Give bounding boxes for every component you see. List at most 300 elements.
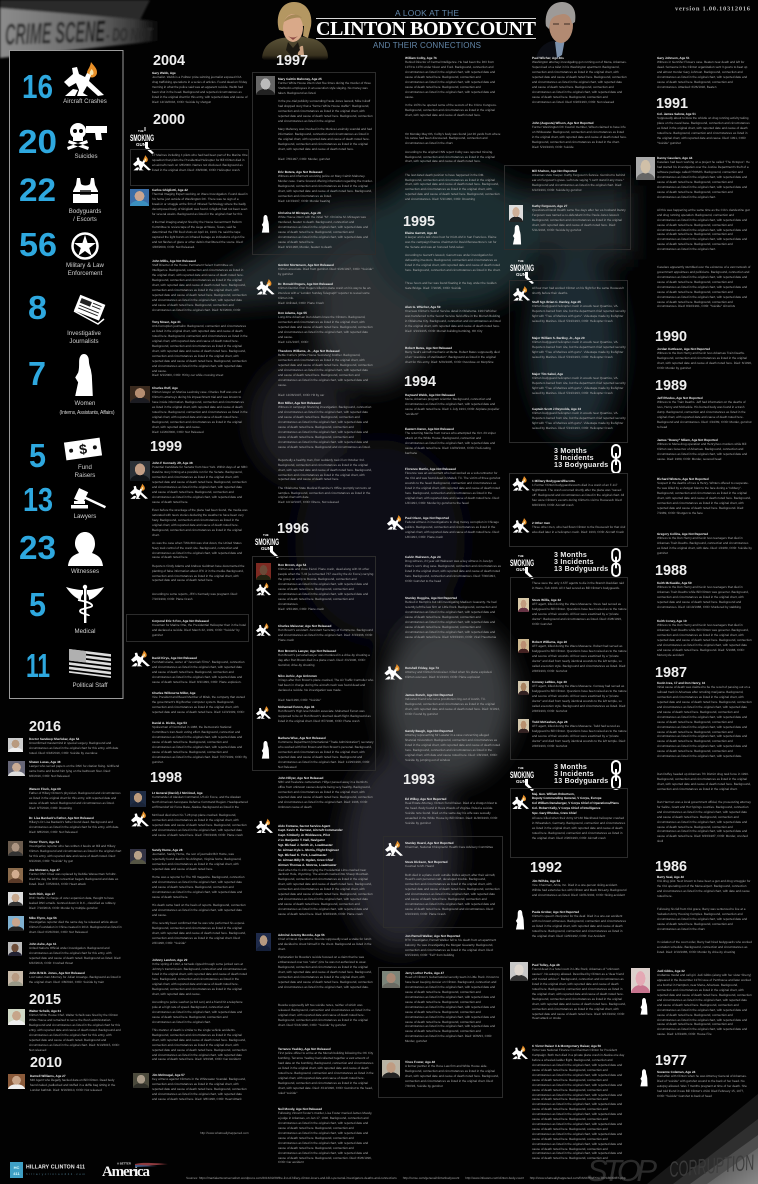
heading: 1996: 1996 — [277, 521, 309, 537]
entry: Elaine Barrett: A lawyer and a talk show host for KGO-AM in San Francisco. Elaine was the campaign finance chairman for David Bonaventure's run for the Senate and was an honored fund-raiser. — [405, 235, 497, 249]
entry: Richard Winters: Richard Winters, Age Not Reported — [657, 476, 709, 480]
women — [28, 354, 115, 416]
icon: plane crash — [131, 650, 150, 666]
photo: Danny Casolaro — [636, 157, 655, 180]
women: Women — [75, 400, 95, 407]
entry: Hershell Friday: Hershell Friday, Age 73 — [405, 666, 439, 670]
entry: Keith Coney: Witness to the Don Henry and Kevin Ives teenagers that died in Arkansas Train Deaths while Bill Clinton was governor. Background, connection and circumstances as listed in the original chart, with reported date and cause of death noted here. Background, connection and circumstances as listed in the original chart, with reported date and cause of death noted here. Background. Died: 5/1988, COD: Motorcycle accident — [657, 623, 752, 657]
entry: V Corps officers: Deputy Commanding General, V Corps, Europe — [532, 796, 601, 800]
entry: Robert Bates: Robert Bates, Age Not Released — [405, 346, 452, 350]
photo: Carlos Ghigliotti — [130, 189, 149, 206]
entry: Christine M Mirzayan: White House intern with the initial "M". Christine M. Mirzayan was murdered, beaten to death. Background, connection and circumstances as listed in the original chart, with reported date and cause of death noted here. Background, connection and circumstances as listed in the original chart, with reported date and cause of death noted here. — [278, 215, 368, 244]
box: bodyguards group — [509, 473, 628, 547]
entry: Darrell Williams: MI6 Agent who illegally hacked data on Bill Clinton. Dead body found naked, padlocked and stuffed in a duffle bag sitting in the London bathtub. Died: 8/16/2010, COD: Not released — [30, 1078, 115, 1092]
entry: Johnny Lawhon: Johnny Lawhon, Age 29 — [152, 958, 187, 962]
icon: plane crash — [256, 279, 275, 295]
entry: Danny Casolaro: All this was happening at the same time as the CIA's clandestine gun and drug running operation. Background, connection and circumstances as listed in the original chart, with reported date and cause of death noted here. Background, connection and circumstances as listed in the original chart, with reported date and cause of death noted here. Background, connection and circumstances as listed in the original chart, with reported date and cause of death noted here. Background, connection and circumstances as listed in the original chart. — [657, 208, 750, 251]
entry: Sandy Hume: Hume was a reporter for The Hill magazine. Background, connection and circumstances as listed in the original chart, with reported date and cause of death noted here. Background, connection and circumstances as listed in the original chart, with reported date and cause of death noted here. — [152, 875, 244, 899]
crime scene tape — [0, 0, 158, 60]
photo: Kathy Ferguson — [509, 205, 523, 222]
entry: Joe Montano: Joe Montano, Age 47 — [29, 868, 60, 872]
entry: Air Force C-130 crew: Sgt. Michael K. York, Loadmaster — [278, 853, 327, 857]
box: Corporal Eric S Fox — [126, 614, 249, 642]
entry: V Corps officers: Col William Densberger, V Corps Chief of Operations/Plans — [532, 801, 619, 805]
entry: Air Force C-130 crew: Capt. Kevin H. Earnest, Aircraft Commander — [278, 828, 343, 832]
entry: Alan G Whicher: Oversaw Clinton's Secret Service detail in Oklahoma. 1994 Whicher was transferred to the Secret Service field office in the Murrah Building in Oklahoma City. Background, connection and circumstances as listed in the original chart, with reported date and cause of death noted here. Died: 4/19/1995, COD: Murrah building bombing, OK City — [405, 309, 501, 333]
political staff: 11 — [26, 647, 50, 684]
entry: Steve Willis: ATF agent, killed during the Waco Massacre. Steve had served as bodyguard to Bill Clinton. Questions have been raised as to the nature and source of their wounds. All four were examined by a "private doctor". Background and circumstances as listed. Died: 2/28/1993, COD: Gunshot — [532, 602, 627, 626]
box: 1997 group — [252, 72, 376, 255]
entry: Mohamed Fenon — [278, 704, 374, 729]
entry: Ron Brown: Clinton aide and close friend. Plane crash, dead along with 34 other people when the T-43 (a converted 737 used by the Air Force) carrying the group on a trip to Bosnia. Background, connection and circumstances as listed in the original chart, with reported date and cause of death noted here. Background, connection and circumstances as listed in the original chart, with reported date and cause of death noted here. Background, connection and circumstances. — [278, 567, 373, 606]
box: helicopter pilot — [130, 149, 249, 186]
icon: smoking gun logo — [510, 764, 536, 791]
entry: Robert Bates — [405, 346, 501, 370]
box: 1996 Ron Brown group — [252, 556, 376, 771]
entry: Ron Miller: Died: 10/12/1997, COD: Illness, Not released — [278, 500, 339, 504]
entry: Kevin Ives and Don Henry: Dan Harmon was a local government official, the prosecuting attorney for Saline, Grant and Hot Springs counties. Background, connection and circumstances as listed in the original chart, with reported date and cause of death noted here. Background, connection and circumstances as listed in the original chart, with reported date and cause of death noted here. Background, connection and circumstances as listed in the original chart, with reported date and cause of death noted here. Died: 8/23/1987, COD: Murder, crushed skull — [657, 800, 751, 843]
entry: Dr Ronald Rogers — [278, 282, 374, 306]
entry: Jordan Kettleson — [657, 346, 752, 376]
women: (Interns, Assistants, Affairs) — [60, 410, 115, 416]
entry: Robert Williams: ATF agent, killed during the Waco Massacre. Robert had served as bodyguard to Bill Clinton. Questions have been raised as to the nature and source of their wounds. All four were examined by a "private doctor" and died from nearly identical wounds to the left temple, so called execution style. Background and circumstances as listed. Died: 2/28/1993, COD: Gunshot — [532, 644, 627, 673]
entry: William Colby: William Colby, Age 76 — [405, 56, 437, 60]
entry: Elaine Barrett: Three hours and her was found floating in the bay under the Golden Gate Bridge. Died: 7/16/95, COD: Suicide — [405, 281, 496, 290]
logo: Hillary Clinton 411: 411 — [13, 1171, 21, 1176]
entry: Ron Brown's Lawyer — [278, 648, 374, 668]
entry: Charles Meissner — [278, 624, 374, 643]
entry: John F Kennedy Jr — [152, 460, 248, 601]
entry: Ron Miller: Reportedly a healthy man, Ron suddenly took ill on October 3rd. Background, connection and circumstances as listed in the original chart, with reported date and cause of death noted here. Background, connection and circumstances as listed in the original chart, with reported date and cause of death noted here. — [278, 458, 372, 481]
lawyers: 13 — [23, 481, 53, 518]
entry: Mohamed Fenon: Mohamed Fenon, Age 36 — [278, 704, 314, 708]
logo: Hillary Clinton 411: hillaryclinton411.com — [26, 1172, 85, 1176]
investigative journalists: Journalists — [69, 338, 99, 345]
entry: William S Barkley: Major William S. Barkley, Jr., Age 29 — [532, 336, 585, 340]
bodyguards and escorts: / Escorts — [73, 216, 97, 223]
entry: Todd McKeehan: ATF agent, killed during the Waco Massacre. Todd had served as bodyguard to Bill Clinton. Questions have been raised as to the nature and source of their wounds. All four were examined by a "private doctor" and died from nearly identical wounds to the left temple. Died: 2/28/1993, COD: Gunshot — [532, 724, 627, 748]
entry: John August Wilson: John (Augusta) Wilson, Age Not Reported — [532, 120, 594, 124]
entry: V Corps officers — [532, 792, 627, 850]
entry: Barry Seal: In violation of the court order, Barry had hired bodyguards who worked a rotation schedule. Background, connection and circumstances as listed. Died: 2/19/1986, COD: Murder by drive-by shooting — [657, 940, 752, 954]
callout: 3 months 3 incidents 13 bodyguards: 3 Months — [554, 447, 587, 455]
entry: Victor Thorn: Victor Thorn, Age 54 — [29, 840, 59, 844]
entry: 1 Military Bodyguards — [532, 478, 627, 513]
suicides: 20 — [18, 123, 57, 160]
photo: Jim McDougal — [133, 1073, 149, 1088]
icon: plane crash — [130, 484, 148, 499]
entry: Kevin Ives and Don Henry: Dan Duffey headed up Arkansas 7th District drug task force in 1990. Background, connection and circumstances as listed in the original chart, with reported date and cause of death noted here. Background, connection and circumstances as listed in the original chart. — [657, 772, 751, 791]
witnesses: 23 — [19, 529, 56, 566]
entry: Tim Sabel — [532, 372, 627, 401]
entry: Dr Ronald Rogers: Died: Unlisted, COD: Plane Crash — [278, 301, 324, 305]
photo: Mike Flynn — [8, 916, 24, 931]
photo: Judi Gibbs — [631, 968, 650, 993]
icon: plane crash — [384, 664, 403, 680]
entry: Jerry Luther Parks: Head of Clinton's Gubernatorial security team in Little Rock. Known to have been keeping dossier on Clinton. Background, connection and circumstances as listed in the original chart, with reported date and cause of death noted here. Background, connection and circumstances as listed in the original chart, with reported date and cause of death noted here. Background, connection and circumstances as listed in the original chart, with reported date and cause of death noted here. Background, connection and circumstances as listed in the original chart, with reported date and cause of death noted here. Background, connection and circumstances as listed in the original chart, with reported date and cause of death noted here. Background, connection and circumstances as listed in the original chart. Died: 9/26/93, COD: Murder, gunshot — [405, 975, 499, 1043]
entry: Charles Ruff: Died: 11/20/2000, COD: Not Released — [152, 430, 204, 434]
entry: Hershell Friday — [405, 666, 501, 685]
photo: Victor Thorn — [8, 841, 23, 856]
entry: Jon Parnell Walker: RTC Investigator, Parnell Walker fell to his death from an apartment balcony. He was investigating the Morgan Guaranty. Background, connection and circumstances as listed in the original chart. Died: 8/15/1993, COD: "Fell" from building — [405, 938, 496, 957]
entry: Daniel A Dickie: Daniel A. Dickie, Age 53 — [152, 720, 187, 724]
heading: 1992: 1992 — [530, 860, 562, 876]
entry: Theodore Williams Jr: Theodore Williams, Jr. , Age Not Released — [278, 348, 340, 352]
entry: Niko Jurisic — [278, 674, 374, 703]
heading: 1990: 1990 — [655, 329, 687, 345]
entry: Alan G Whicher: Alan G. Whicher, Age 59 — [405, 304, 440, 308]
icon: plane crash — [512, 793, 529, 811]
icon: smoking gun logo: GUN — [261, 546, 271, 551]
entry: Ron Brown's Lawyer: Ron Brown's Lawyer, Age Not Released — [278, 648, 336, 652]
entry: 2 Other men: 2 Other men — [532, 520, 550, 524]
icon: smoking gun logo: SMOKING — [510, 558, 534, 569]
entry: Charles Ruff: Clinton lawyer on Monica Lewinsky case. Charles Ruff was one of Clinton's attorneys during his impeachment trial and was known to have inside information. Background, connection and circumstances as listed in the original chart, with reported date and cause of death noted here. Background, connection and circumstances as listed in the original chart, with reported date and cause of death noted here. Background, connection and circumstances as listed in the original chart, with reported date and cause. — [152, 390, 248, 429]
photo: Mary Caitrin Mahoney — [256, 76, 275, 95]
icon: woman — [515, 910, 525, 930]
entry: Calvin Walraven: Calvin Walraven, Age 24 — [405, 554, 441, 558]
aircraft crashes: 16 — [22, 68, 53, 105]
entry: Walter Scheib: Walter Scheib, Age 61 — [29, 1008, 61, 1012]
entry: V Corps officers: All were killed when their Army UH-60 Blackhawk helicopter crashed in Wheatsden, Germany. Background, connection and circumstances as listed in the original chart, with reported date and cause of death noted here. Background, connection and circumstances as listed in the original chart. Died: 2/20/1993, COD: Aircraft crash — [532, 816, 625, 840]
entry: James Dewey Milam: Witness to Mena drug operation and Henry/Ives murders while Bill Clinton was Governor of Arkansas. Background, connection and circumstances as listed in the original chart, with reported date and cause. Died: 1989, COD: Murder, severed head — [657, 442, 747, 461]
entry: Sandy Hume: Sandy Hume, Age 28 — [152, 848, 182, 852]
icon: smoking gun logo: GUN — [516, 567, 526, 572]
entry: Johnny Lawhon — [152, 958, 247, 1061]
entry: Kathy Ferguson: Questioned David Dealth same five days after her ex-husband Danny Ferguson was named a co-defendant in the Paula Jones lawsuit. Background, connection and circumstances as listed in the original chart, with reported date and cause of death noted here. Died: 5/11/1994, COD: Suicide by gunshot — [532, 208, 626, 232]
entry: Christine M Mirzayan: Christine M Mirzayan, Age 28 — [278, 210, 321, 214]
bodyguards and escorts: Bodyguards — [69, 208, 101, 215]
entry: Shawn Lucas: Shawn Lucas, Age 38 — [29, 760, 61, 764]
entry: James Dewey Milam — [657, 438, 752, 472]
heading: 1987: 1987 — [655, 665, 687, 681]
suicides: Suicides — [74, 153, 98, 160]
entry: William Colby: On Monday May 6th, Colby's body was found just 20 yards from where his canoe had been discovered. Background, connection and circumstances as listed in the chart. — [405, 132, 500, 145]
entry: Steve Willis — [532, 598, 627, 632]
entry: Mike Flynn: Mike Flynn, Age 56 — [29, 916, 57, 920]
entry: Mohamed Fenon: Ron Brown's High level Muslim associate. Mohamed Fenon was supposed to be on Ron Brown's doomed death flight. Background as listed in the original chart. Died: 8/7/1996, COD: Plane crash — [278, 709, 371, 723]
entry: Gary Johnson: Gary Johnson, Age 51 — [657, 56, 690, 60]
entry: Lt General McCloud — [152, 790, 248, 837]
entry: Charles Meissner: Charles Meissner, Age Not Released — [278, 624, 331, 628]
entry: Robert Williams: Robert Williams, Age 26 — [532, 640, 567, 644]
political staff — [26, 647, 111, 689]
logo: Hillary Clinton 411 — [8, 1158, 88, 1182]
military and law enforcement: Enforcement — [68, 270, 103, 277]
entry: Ron Brown's Lawyer: Ron Brown's personal lawyer was murdered in a drive-by shooting a day after Ron Brown died in a plane crash. Died: 4/4/1996, COD: Gunshot, drive-by shooting — [278, 653, 370, 667]
callout: 3 months 3 incidents 13 bodyguards: 3 Incidents — [554, 454, 594, 462]
icon: smoking gun logo: SMOKING — [130, 133, 154, 144]
entry: Sandy Hume: His death came hard on the heels of reports. Background, connection and circumstances as listed in the original chart, with reported date and cause. — [152, 903, 246, 917]
icon: plane crash — [133, 155, 151, 170]
callout: 3 months 3 incidents 13 bodyguards: 13 Bodyguards — [554, 565, 608, 573]
entry: Johnny Lawhon: This manner of death is similar to the single vehicle accidents. Background, connection and circumstances as listed in the original chart, with reported date and cause of death noted here. Background, connection and circumstances as listed in the original chart, with reported date and cause of death noted here. Background, connection and circumstances as listed in the original chart, with reported date and cause of death noted here. Died: 3/29/98, COD: Car Accident — [152, 1028, 247, 1061]
entry: Brian C Hanley: Staff Sgt. Brian C. Hanley, Age 25 — [532, 300, 581, 304]
icon: smoking gun logo: GUN — [136, 142, 146, 147]
entry: Christine M Mirzayan — [278, 210, 374, 250]
entry: Theodore Williams Jr: Bettie Currie's (White House Secretary) brother. Background, connection and circumstances as listed in the original chart, with reported date and cause of death noted here. Background, connection and circumstances as listed in the original chart, with reported date and cause of death noted here. Background, connection and circumstances as listed in the original chart, with reported date and cause. — [278, 353, 373, 387]
icon: smoking gun logo: SMOKING — [255, 537, 279, 548]
entry: Elaine Barrett: Elaine Garrett, Age 46 — [405, 230, 437, 234]
text: ATF agents intro: These were the only 4 ATF agents to die in the Branch Davidian raid in Waco, Feb 1993. All 4 had served as Bill Clinton's bodyguards. — [532, 581, 624, 590]
box: 1993 helicopter group — [509, 280, 628, 443]
photo: Sherlekar — [8, 738, 23, 752]
photo: McCloud — [130, 791, 146, 807]
entry: Gary Johnson — [657, 56, 752, 95]
entry: Admiral Jeremy Boorda: Boorda supposedly left two suicide notes, neither of which was released. Background, connection and circumstances as listed in the original chart, with reported date and cause of death noted here. Background, connection and circumstances as listed in the original chart. Died: 5/16/1996, COD: "Suicide" by gunshot — [278, 1003, 371, 1027]
entry: James Dewey Milam: James "Dewey" Milam, Age Not Reported — [657, 438, 718, 442]
entry: Mike Flynn: Investigative reporter died the same day he released article about Clinton Foundation in China created in 2014. Background as listed in chart. Died: 6/23/2016, COD: Not Released — [29, 920, 122, 934]
photo: Charles Ruff — [130, 386, 150, 403]
icon: chain — [611, 548, 621, 577]
entry: Danny Casolaro — [657, 156, 752, 324]
entry: David Kirys: David Kirys, Age Not Released — [152, 656, 197, 660]
investigative journalists: 8 — [28, 289, 47, 326]
entry: Scott J Reynolds: Clinton bodyguard helicopter crash in woods near Quantico, VA. Reporters barred from site, but the department chief reported security fight with "Tree of Marines with guns". Videotape made by firefighter seized by Marines. Died: 5/19/1993, COD: Helicopter Crash — [532, 411, 626, 430]
icon: smoking gun logo — [510, 552, 536, 579]
entry: Eleanor Darwin: Eastern Daren, Age Not Released — [405, 426, 454, 430]
entry: Corporal Eric S Fox: Corporal Eric S Fox, Age Not Released — [152, 618, 209, 622]
box: ATF agents group — [510, 577, 628, 760]
medical — [29, 585, 104, 635]
photo: Walter Scheib — [8, 1009, 25, 1025]
entry: Neil Moody: Neil Moody, Age Not Released — [278, 1106, 322, 1110]
fund raisers: Raisers — [75, 472, 95, 479]
photo: Sandy Hume — [130, 849, 146, 864]
lawyers — [23, 481, 108, 520]
entry: Danny Casolaro: Casolaro had been working on a project he called "The Octopus". He had started his investigation over the Justice Department's theft of a software package called PROMIS. Background, connection and circumstances as listed in the original chart, with reported date and cause of death noted here. Background, connection and circumstances as listed in the original chart, with reported date and cause of death noted here. Background, connection and circumstances as listed in the original chart. — [657, 160, 750, 199]
military and law enforcement: Military & Law — [66, 262, 105, 269]
entry: John F Kennedy Jr: Even before the wreckage of the plane had been found, the media was saturated with news stories declaring the weather to have been very hazy. Background, connection and circumstances as listed in the original chart, with reported date and cause of death noted here. Background, connection and circumstances as listed in the original chart. — [152, 508, 248, 536]
entry: Sandy Hume: If he recently been confirmed that he was who performed his exposé. Background, connection and circumstances as listed in the original chart, with reported date and cause of death noted here. Background, connection and circumstances as listed in the original chart. Died: 2/2/1998, COD: "Suicide" — [152, 921, 246, 945]
entry: Paul Wilcher: Washington attorney investigating gun running out of Mena, Arkansas. Supervised on a toilet in his Washington apartment. Background, connection and circumstances as listed in the original chart, with reported date and cause of death noted here. Background, connection and circumstances as listed in the original chart, with reported date and cause of death noted here. Background, connection and circumstances as listed in the original chart, with reported date and cause of death noted here. Background, connection and circumstances as listed. Died: 6/22/1993, COD: Not released — [532, 60, 627, 104]
entry: Judi Gibbs: Arubance model and call girl. Judi Gibbs (along with her sister Sherry) appeared in the December 1979 issue of Penthouse and later worked at a brothel in Hampton, near Mena, Arkansas. Background, connection and circumstances as listed in the original chart, with reported date and cause of death noted here. Background, connection and circumstances as listed in the original chart, with reported date and cause of death noted here. Background, connection and circumstances as listed in the original chart, with reported date and cause of death noted here. Background, connection and circumstances as listed in the original chart, with reported date and cause of death noted here. Background, connection and circumstances as listed in the original chart, with reported date and cause. Died: 1/2/1986, COD: House Fire — [657, 973, 752, 1036]
entry: Eric Butera: Witness and informant assisting police on Mary Caitrin Mahoney. Murder case. Came forward offering information regarding the murder. Background, connection and circumstances as listed in the original chart, with reported date and cause of death noted here. Background, connection and circumstances as listed. — [278, 174, 373, 198]
heading: 1995: 1995 — [403, 214, 435, 230]
photo: Ron Brown — [256, 563, 271, 580]
icon: smoking gun logo — [510, 257, 536, 284]
entry: Niko Jurisic: Died: Mar/1996, COD: "Suicide" — [278, 698, 321, 702]
photo: Robert Williams — [518, 639, 529, 653]
callout: 3 months 3 incidents 13 bodyguards — [554, 448, 610, 470]
entry: Tony Moser: Anti-Corruption journalist. Background, connection and circumstances as listed in the original chart, with reported date and cause of death noted here. Background, connection and circumstances as listed in the original chart, with reported date and cause of death noted here. Background, connection and circumstances as listed in the original chart, with reported date and cause of death noted here. Background, connection and circumstances as listed in the original chart, with reported date and cause of death noted here. Background, connection and circumstances as listed in the original chart, with reported date and cause. — [152, 324, 248, 373]
entry: Stanley Heard: Stanley Heard, Age Not Reported — [405, 840, 454, 844]
entry: Keith McKaskle: Keith McKaskle, Age 59 — [657, 580, 692, 584]
photo: Bill Clinton — [536, 2, 576, 58]
version label: version 1.00.10312016 — [675, 6, 751, 12]
heading: 1989: 1989 — [655, 378, 687, 394]
entry: John Jones — [29, 970, 121, 984]
entry: Christine M Mirzayan: Died: 8/1/1998, Murder, beaten to death — [278, 245, 332, 249]
fund raisers: $ — [78, 441, 88, 457]
entry: Bill Shelton — [532, 168, 627, 198]
entry: Kevin Ives and Don Henry: Kevin Ives, 17 and Don Henry, 16 — [657, 680, 705, 684]
fund raisers: Fund — [78, 464, 92, 471]
entry: Air Force C-130 crew: Sr. Airman Billy R. Ogden, Crew Chief — [278, 858, 333, 862]
witnesses — [19, 529, 103, 575]
entry: Richard Winters: Suspect in the deaths of Ives & Henry. Winters offered to cooperate. He was killed by a shotgun blast to the face during a "robbery". Background, connection and circumstances as listed in the original chart, with reported date and cause of death noted here. Background, connection and circumstances as listed in the original chart, with reported date and cause of death noted here. Background. Died: 7/1989, COD: Shotgun to the face — [657, 481, 751, 515]
entry: Brian C Hanley — [532, 300, 627, 329]
icon: plane crash — [256, 582, 271, 596]
icon: plane crash — [256, 622, 271, 637]
entry: John F Kennedy Jr: According to some reports, JFK's Kennedy was pregnant. Died: 7/16/1999, COD: Plane Crash — [152, 592, 238, 601]
entry: Barry Seal — [657, 874, 752, 960]
entry: Theodore Williams Jr — [278, 348, 374, 397]
entry: William Colby: The last dated death position to have happened in the DM. Background, connection and circumstances as listed in the original chart, with reported date and cause of death noted here. Background, connection and circumstances as listed in the original chart, with reported date and cause of death noted here. Background, connection and circumstances. Died: 5/1/1996, COD: Drowning — [405, 173, 500, 201]
icon: woman — [261, 741, 270, 759]
entry: Sandy Hume — [152, 848, 246, 945]
entry: Jeff Rhodes: Jeff Rhodes, Age Not Reported — [657, 396, 703, 400]
entry: Jon Parnell Walker: Jon Parnell Walker, Age Not Reported — [405, 934, 460, 938]
photo: Paul Tulley — [510, 962, 528, 981]
entry: Sandeep Sherlekar: Unconfirmed mastermind in special surgery. Background and circumstances as listed in the original chart for this entry, with date noted. Died: 9/18/2016, COD: Suicide by overdose — [29, 741, 118, 755]
entry: Keith Coney — [657, 618, 752, 667]
icon: smoking gun logo: THE — [518, 766, 524, 770]
entry: Jeff Rhodes: Witness to the Train Deaths. Jeff had information on the deaths of Ives, Henry and McKaskle. His burned body was found in a trash dump. Background, connection and circumstances as listed in the original chart, with reported date and cause of death noted here. Background and circumstances. Died: 4/19/89, COD: Murder, gunshot to head — [657, 400, 752, 429]
entry: Tony Moser: Tony Moser, Age 31 — [152, 320, 181, 324]
photo: Shawn Lucas — [8, 761, 25, 776]
entry: helicopter pilot: 17 Marines including 4 pilots who had had been part of the Marine One squadron that pilots the Presidential Helicopter for Bill Clinton died in an aircraft crash on 4/8/2000. Names not disclosed. Background as listed in the original chart. Died: 4/8/2000, COD: Helicopter crash. — [152, 153, 248, 172]
entry: William S Barkley — [532, 336, 627, 365]
entry: Suzanne Coleman: Suzanne Coleman, Age 24 — [657, 1070, 695, 1074]
women: 7 — [28, 355, 46, 392]
entry: Gary Johnson: Witness in Gennifer Flowers case. Beaten near death and left for dead. Someone in the Clinton organization sent 3 goons to beat up and almost murder Gary Johnson. Background, connection and circumstances as listed in the original chart, with reported date and cause of death noted here. Background, connection and circumstances. Attacked: 6/26/1992, Beaten — [657, 60, 747, 89]
entry: Terrance Yeakley: First police officer to arrive at the Murrah building following the OK City bombing. Terrance Yeakley had collected together a vast amount of hard data on the bombing. Background, connection and circumstances as listed in the original chart, with reported date and cause of death noted here. Background, connection and circumstances as listed in the original chart, with reported date and cause of death noted here. Background, connection and circumstances as listed in the original chart, with reported date. Died: 4/19/1996, COD: Gunshot to the head, ruled "suicide" — [278, 1051, 374, 1095]
heading: 1999: 1999 — [150, 439, 182, 455]
photo: Hillary Clinton — [262, 2, 328, 60]
entry: John August Wilson: Former Washington DC Council member, Wilson claimed to have info on Whitewater. Background, connection and circumstances as listed in the original chart, with reported date and cause of death noted here. Background, connection and circumstances as listed in the chart. Died: 5/19/1993, COD: Suicide — [532, 125, 627, 149]
entry: Sandeep Sherlekar: Doctor Sandeep Sherlekar, Age 54 — [29, 736, 79, 740]
entry: John F Kennedy Jr: As was the case when TWA 800 was shot down, the United States Navy took control of the crash site. Background, connection and circumstances as listed in the original chart, with reported date and cause of death noted here. — [152, 541, 242, 559]
entry: John Millis: John Millis, Age Not Released — [152, 258, 196, 262]
entry: Ron Miller: Ron Miller, Age Not Released — [278, 400, 321, 404]
photo: Jerry Parks — [382, 971, 400, 988]
icon: smoking gun logo: THE — [518, 554, 524, 558]
entry: Brian C Hanley: Clinton bodyguard helicopter crash in woods near Quantico, VA. Reporters barred from site, but the department chief reported security fight with "Tree of Marines with guns". Videotape made by firefighter seized by Marines. Died: 5/19/1993, COD: Helicopter Crash — [532, 304, 626, 323]
aircraft crashes: Aircraft Crashes — [63, 98, 107, 105]
entry: Bill Shelton: Arkansas state trooper. Kathy Ferguson's fiancée. Gunshot to behind ear on Ferguson's grave. Left note saying "I can't stand it any more." Background and circumstances as listed in the original chart. Died: 6/12/1994, COD: Suicide by gunshot — [532, 173, 625, 192]
entry: Jim Wilhite: Vice Chairman, Arkla, Inc. Died in a one-person skiing accident. Wilhite had extensive ties with Clinton and Mack McLarty. Background and circumstances as listed. Died: 12/21/1992, COD: Skiing accident — [532, 883, 626, 897]
heading: 1991: 1991 — [656, 96, 688, 112]
entry: Neil Moody: Following Vincent Foster's murder, Lisa Foster married James Moody, a judge in Arkansas, on Jan 17, 1996. Background, connection and circumstances as listed in the original chart, with reported date and cause of death noted here. Background, connection and circumstances as listed in the original chart, with reported date and cause of death noted here. Background, connection and circumstances as listed in the original chart, with reported date and cause of death noted here. Background, connection and circumstances as listed in the original chart, with reported date and cause of death noted here. Background, connection. Died: 8/26/1996, COD: Car accident — [278, 1111, 372, 1164]
entry: Hayward Webb: Mena, Arkansas program scientist. Background, connection and circumstances as listed in the original chart, with reported date and cause of death noted here. Died: 1 July 1994, COD: Airplane propeller "accident" — [405, 397, 500, 416]
entry: Steve Dickson — [405, 860, 501, 869]
icon: chain — [611, 760, 621, 790]
callout: 3 months 3 incidents 13 bodyguards: 3 Months — [554, 763, 587, 771]
photo: Joe Montano — [8, 868, 23, 883]
entry: John Ashe: United Nations Official under investigation. Background and circumstances as listed in the original chart for this entry, with reported date and cause of death noted. Background as listed. Died: 6/22/2016, COD: Crushed throat — [29, 946, 121, 965]
entry: V Corps officers: Col. Robert Kelly, V Corps Chief of Intelligence — [532, 806, 601, 810]
entry: Air Force C-130 crew: Sr. Airman Kyle L. Morris, Flight Engineer — [278, 848, 339, 852]
heading: 2004: 2004 — [153, 53, 185, 69]
icon: plane crash — [512, 518, 530, 533]
box: 1993 Parks and Foster — [378, 967, 503, 1098]
entry: Stanley Heard — [405, 840, 501, 855]
photo: Conway LeBleu — [518, 681, 529, 695]
entry: Paula Grober: Paula Grober, Age Not Reported — [532, 910, 579, 914]
entry: Barry Seal: Barry Seal, Age 46 — [657, 874, 684, 878]
entry: Air Force C-130 crew: Died when the C-130 carrying the Presidential Limo crashed near Jackson Hole, Wyoming. The aircraft crashed into Sheep Mountain. Background, connection and circumstances as listed in the original chart, with reported date and cause of death noted here. Background, connection and circumstances as listed in the original chart, with reported date and cause of death noted here. Background, connection and circumstances as listed in the original chart, with reported date and cause of death noted here. Background, connection and circumstances as listed in the original chart, with reported date and cause of death noted here. Died: 8/18/1996, COD: Plane crash — [278, 868, 373, 916]
icon: smoking gun logo: GUN — [516, 779, 526, 784]
callout: 3 months 3 incidents 13 bodyguards: 3 Incidents — [554, 558, 594, 566]
callout: 3 months 3 incidents 13 bodyguards — [554, 552, 610, 574]
entry: Gandy Baugh: Attorney representing Mr Lasater in a case concerning alleged financial misconduct. Background, connection and circumstances as listed in the original chart, with reported date and cause of death noted here. Background, connection and circumstances as listed in the original chart, with date and cause noted here. Died: 1/8/1994, COD: Suicide by jumping out of window — [405, 733, 500, 762]
entry: Victor Thorn: Investigative reporter who has written 4 books on Bill and Hillary Clinton. Background and circumstances as listed in the original chart for this entry, with reported date and cause of death noted. Died: 8/1/2016, COD: "Suicide" by gun — [29, 844, 121, 863]
entry: Admiral Jeremy Boorda: Admiral Jeremy Boorda, Age 56 — [278, 932, 325, 936]
military and law enforcement — [19, 226, 105, 277]
callout: 3 months 3 incidents 13 bodyguards: 13 Bodyguards — [554, 461, 608, 469]
icon: plane crash — [512, 476, 530, 491]
entry: Vince Foster — [405, 1060, 501, 1094]
fund raisers — [29, 437, 102, 479]
photo: Darrell Williams — [8, 1074, 25, 1089]
entry: William Colby — [405, 56, 501, 207]
entry: Dr Lisa Bardack's Father: Dr. Lisa Bardack's Father, Age Not Released — [29, 816, 94, 820]
entry: Victor Raiser II and Montgomery Raiser: C Victor Raiser II & Montgomery Raiser, Age 50 — [532, 1044, 601, 1048]
entry: Mary Caitrin Mahoney: Mary Caitrin Mahoney, Age 25 — [278, 76, 322, 80]
entry: John F Kennedy Jr: John F Kennedy JR, Age 38 — [152, 460, 193, 464]
entry: Walter Flock: Father of Hillary Clinton's physician. Background and circumstances as listed in the original chart for this entry, with reported date and cause of death noted. Background and circumstances as listed. Died: 8/7/2016, COD: Drowning — [29, 791, 121, 810]
entry: Paula Grober — [532, 910, 627, 949]
icon: woman — [261, 215, 270, 233]
icon: smoking gun logo: THE — [138, 129, 144, 133]
entry: Hayward Webb: Hayward Webb, Age Not Released — [405, 392, 455, 396]
entry: Shawn Lucas: Lawyer who served papers on the DNC for citation fixing. Girlfriend came home and found him lying on the bathroom floor. Died: 8/2/2016, COD: Not Released — [29, 764, 119, 778]
entry: Ron Miller: The Oklahoma State Medical Examiner's Office promptly ran tests on samples. Background, connection and circumstances as listed in the original chart with date. — [278, 486, 371, 499]
icon: plane crash — [512, 286, 531, 301]
entry: Florence Martin: Florence was an accountant who had worked as a sub-contractor for the CIA and was found dead in Mabell, TX. The victim of three gunshot wounds to the head. Background, connection and circumstances as listed in the original chart, with reported date and cause of death noted here. Background, connection and circumstances as listed in the original chart, with reported date and cause of death noted here. Died: 1/2/1994, COD: Murder by gunshot to the head — [405, 471, 500, 505]
title block: AND THEIR CONNECTIONS — [373, 41, 481, 50]
entry: Elaine Barrett — [405, 230, 501, 296]
entry: Eric Butera: Died: 12/4/1997, COD: Murder beating — [278, 199, 330, 203]
entry: Mary Caitrin Mahoney: In the pre-trial publicity surrounding Paula Jones lawsuit, Mike Isikoff had dropped story that a "former White House staffer". Background, connection and circumstances as listed in the original chart, with reported date and cause of death noted here. Background, connection and circumstances as listed in the original. — [278, 99, 373, 123]
entry: 1 Military Bodyguards: 1 Former Clinton bodyguard/escorts died in a crash of an F-117 Nighthawk. The crash occurred shortly after the plane was "waved off". Background and circumstances as listed in the original chart. All four were Clinton's escorts during Clinton's visit to Roosevelt. Died: 8/26/1993, COD: Aircraft crash — [532, 483, 624, 507]
heading: 1997: 1997 — [276, 53, 308, 69]
entry: Paul Tulley: Paul Tulley, Age 48 — [532, 962, 560, 966]
source url: http://www.whatreallyhappened.com — [200, 1131, 249, 1135]
entry: Carlos Ghigliotti — [152, 188, 248, 249]
suicides — [18, 123, 107, 160]
entry: Niko Jurisic: Niko Jurkic, Age Unknown — [278, 674, 317, 678]
logo: A Better America: America — [102, 1164, 150, 1180]
entry: Paul Tulley: Found dead in a hotel room in Little Rock, Arkansas of "unknown causes". No autopsy allowed. Described by Clinton as a "dear friend and trusted advisor". Background, connection and circumstances as listed in the original chart, with reported date and cause of death noted here. Background, connection and circumstances as listed in the original chart, with reported date and cause of death noted here. Background, connection and circumstances as listed in the original chart, with reported date and cause of death noted here. Background, connection and circumstances as listed in the original chart, with reported date and cause of death noted here. Died: 9/24/1992, COD: Heart attack or stroke — [532, 967, 626, 1020]
entry: Admiral Jeremy Boorda: Chief of Naval Operations. Boorda supposedly used a stake for lunch and decided to shoot himself in the chest. Background as listed in the chart. — [278, 937, 372, 951]
entry: Ed Willey: Real Estate Attorney, Clinton Fund Raiser. Died of a shotgun blast to the head. Body found in Reva Woods of Virginia. Ruled a suicide. Suicide note found. Died on the same day his wife was sexually assaulted in the White House by Bill Clinton. Died: 11/20/1993, COD: Suicide by gunshot — [405, 801, 498, 825]
entry: Conway LeBleu: ATF agent, killed during the Waco Massacre. Conway had served as bodyguard to Bill Clinton. Questions have been raised as to the nature and source of their wounds. All four were examined by a "private doctor" and died from nearly identical wounds to the left temple, so called execution style. Background and circumstances as listed. Died: 2/28/1993, COD: Gunshot — [532, 684, 627, 713]
entry: Johnny Lawhon: In the spring of 1992, a tornado ripped through some junked cars at Johnny's transmission. Background, connection and circumstances as listed in the original chart, with reported date and cause of death noted here. Background, connection and circumstances as listed in the original chart, with reported date and cause of death noted here. Background, connection and circumstances as listed in the original chart, with reported date and cause. — [152, 962, 247, 996]
entry: Mary Caitrin Mahoney: Died: 7/6/1997, COD: Murder, gunshot — [278, 157, 330, 161]
heading: 1993: 1993 — [403, 772, 435, 788]
entry: John F Kennedy Jr: Reporters Cindy Adams and Andrew Goldman have documented the planting of false information about JFK Jr in the media. Background, connection and circumstances as listed in the original chart, with reported date and cause of death noted here. — [152, 564, 244, 582]
entry: Todd McKeehan: Todd McKeehan, Age 28 — [532, 720, 567, 724]
entry: Eleanor Darwin: The returning Marine from nurses who attempted the Oct. 29 sniper attack on the White House. Background, connection and circumstances as listed in the original chart, with reported date and cause of death noted here. Died: 10/29/1994, COD: Pedi-cating barrhane — [405, 431, 496, 455]
entry: Charles Meissner: Ron Brown's assistant. Assistant Secretary of Commerce. Background and circumstances as listed in the original chart. Died: 4/3/1996, COD: Plane crash — [278, 628, 373, 642]
entry: Stanley Huggins — [405, 596, 501, 649]
icon: smoking gun logo — [255, 531, 281, 558]
entry: Air Force C-130 crew: Capt. Kimberly Jo Widdesove, Pilot — [278, 833, 330, 837]
heading: 2016: 2016 — [29, 719, 61, 735]
entry: Stanley Heard: Chairman, National Chiropractic Health Care Advisory Committee — [405, 845, 493, 849]
entry: Seth Rich: Seth Rich, Age 27 — [29, 892, 55, 896]
box: 1993 plane group — [383, 836, 503, 928]
heading: 2010: 2010 — [30, 1055, 62, 1071]
entry: Kevin Ives and Don Henry: Initial cause of death was claimed to be the result of passing out on a railroad track in Arkansas after smoking marijuana. Background, connection and circumstances as listed in the original chart, with reported date and cause of death noted here. Background, connection and circumstances as listed in the original chart, with reported date and cause of death noted here. Background, connection and circumstances as listed in the original chart, with reported date and cause of death noted here. Background, connection and circumstances as listed in the original chart, with reported date and cause of death noted here. Background, connection and circumstances as listed in the original chart, with reported date and cause of death noted here. Background, connection and circumstances as listed in the original chart, with reported date and cause of death noted here. Background, connection and circumstances as listed in the original chart, with reported date. — [657, 685, 752, 758]
entry: Keith McKaskle: Witness to the Don Henry and Kevin Ives teenagers that died in Arkansas Train Deaths while Bill Clinton was governor. Background, connection and circumstances as listed in the original chart, with reported date and cause of death noted here. Background and circumstances. Died: 11/10/1988, COD: Murdered by stabbing — [657, 585, 749, 609]
entry: Jon Parnell Walker — [405, 934, 501, 963]
icon: plane crash — [386, 515, 405, 530]
title block: CLINTON BODYCOUNT — [316, 18, 537, 40]
entry: John August Wilson — [532, 120, 627, 160]
